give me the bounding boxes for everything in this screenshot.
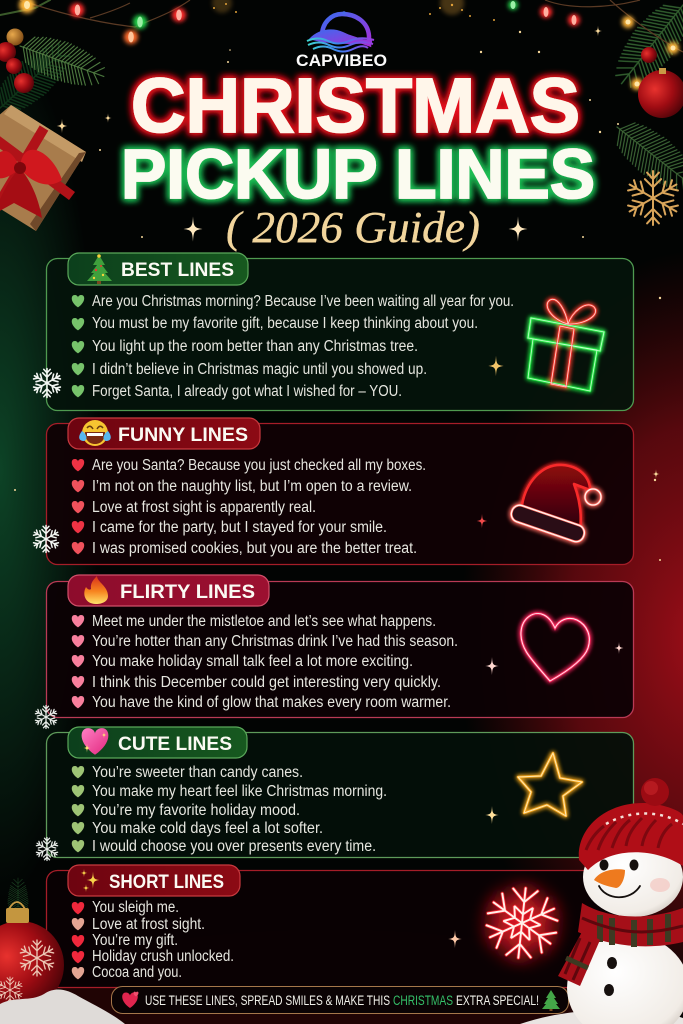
list: cute lines: You’re sweeter than candy canes. (92, 764, 303, 781)
logo (296, 11, 387, 70)
heading: short lines (68, 865, 240, 896)
list: cute lines: You’re my favorite holiday mood. (92, 802, 300, 819)
list: funny lines: I’m not on the naughty list, but I’m open to a review. (92, 478, 412, 495)
list: funny lines: Are you Santa? Because you just checked all my boxes. (92, 457, 426, 474)
list: best lines: You must be my favorite gift, because I keep thinking about you. (92, 315, 478, 332)
snow bottom left (0, 990, 125, 1024)
icon: small snowflake (32, 526, 60, 552)
list: cute lines: You make my heart feel like Christmas morning. (92, 783, 387, 800)
face (594, 860, 670, 897)
brand name: CAPVIBEO (296, 52, 387, 70)
sparkle (614, 642, 624, 654)
list: short lines: Cocoa and you. (92, 964, 182, 981)
panel: best lines (32, 253, 633, 410)
list: funny lines (72, 457, 426, 557)
gift box top left (0, 105, 86, 231)
footer text: USE THESE LINES, SPREAD SMILES & MAKE THIS (145, 993, 390, 1008)
list: short lines: You’re my gift. (92, 932, 178, 949)
snowman (558, 778, 683, 1024)
heading: funny lines (68, 418, 260, 449)
sparkle right (509, 216, 527, 242)
sparkle (488, 356, 504, 376)
subtitle: ( 2026 Guide) (226, 203, 480, 252)
icon: christmas tree (87, 254, 112, 284)
icon: small snowflake (32, 368, 62, 398)
golden sparkle clusters at top (212, 0, 495, 21)
hat (579, 778, 683, 870)
star dust (14, 26, 661, 561)
sparkle (485, 657, 499, 675)
list: best lines (72, 293, 514, 400)
footer banner (112, 986, 568, 1014)
list: funny lines: Love at frost sight is apparently real. (92, 499, 316, 516)
list: short lines (72, 899, 234, 981)
list: best lines: I didn’t believe in Christmas magic until you showed up. (92, 361, 427, 378)
body (567, 934, 683, 1024)
title line: Christmas: CHRISTMAS (131, 63, 580, 149)
list: flirty lines (72, 613, 458, 711)
list: flirty lines: I think this December could get interesting very quickly. (92, 674, 441, 691)
pine branches top left (0, 0, 111, 123)
panel: short lines (46, 865, 636, 988)
sparkle (448, 930, 462, 948)
icon: neon snowflake (482, 884, 562, 962)
icon: laughing face (79, 420, 111, 446)
heading: best lines: BEST LINES (121, 259, 234, 281)
icon: sparkling heart (82, 728, 108, 755)
footer text: CHRISTMAS (393, 993, 453, 1008)
icon: small snowflake (34, 706, 58, 728)
sparkle left (184, 216, 202, 242)
list: flirty lines: You make holiday small talk feel a lot more exciting. (92, 653, 413, 670)
buttons (604, 957, 617, 996)
list: cute lines (72, 764, 387, 855)
heading: flirty lines (68, 575, 269, 606)
icon: fire (84, 576, 108, 604)
list: funny lines: I came for the party, but I stayed for your smile. (92, 519, 387, 536)
icon: neon gift (528, 299, 604, 391)
list: best lines: You light up the room better than any Christmas tree. (92, 338, 418, 355)
list: funny lines: I was promised cookies, but you are the better treat. (92, 540, 417, 557)
list: short lines: You sleigh me. (92, 899, 179, 916)
string lights top left (19, 0, 190, 44)
panel: funny lines (32, 418, 634, 564)
sparkle (477, 514, 487, 528)
list: short lines: Love at frost sight. (92, 916, 205, 933)
list: short lines: Holiday crush unlocked. (92, 948, 234, 965)
icon: neon santa hat (509, 465, 601, 544)
list: cute lines: I would choose you over presents every time. (92, 838, 376, 855)
title (121, 63, 595, 252)
gold snowflake top right (626, 171, 680, 225)
list: flirty lines: You’re hotter than any Christmas drink I’ve had this season. (92, 633, 458, 650)
string lights top right (508, 0, 683, 90)
list: best lines: Forget Santa, I already got what I wished for – YOU. (92, 383, 402, 400)
baubles top right (638, 47, 683, 118)
list: best lines: Are you Christmas morning? Because I’ve been waiting all year for you. (92, 293, 514, 310)
icon: heart (122, 992, 138, 1008)
title line: Pickup Lines: PICKUP LINES (121, 135, 595, 213)
pine branches top right (604, 0, 683, 201)
heading: funny lines: FUNNY LINES (118, 424, 248, 446)
list: flirty lines: Meet me under the mistletoe and let’s see what happens. (92, 613, 436, 630)
heading: flirty lines: FLIRTY LINES (120, 581, 255, 603)
heading: cute lines (68, 727, 247, 758)
heading: best lines (68, 253, 248, 285)
icon: cap logo (307, 11, 374, 51)
footer text: EXTRA SPECIAL! (456, 993, 539, 1008)
sparkle (485, 806, 499, 824)
icon: sparkles (81, 869, 99, 892)
icon: small snowflake (35, 838, 59, 860)
head (583, 837, 683, 917)
icon: tree (542, 990, 560, 1011)
icon: neon heart (521, 614, 589, 681)
panel: cute lines (35, 727, 633, 860)
icon: neon star (518, 753, 582, 816)
scarf (558, 903, 683, 986)
snow bottom right (520, 1009, 683, 1024)
ornament bottom left (0, 878, 64, 1009)
list: cute lines: You make cold days feel a lot softer. (92, 820, 323, 837)
list: flirty lines: You have the kind of glow that makes every room warmer. (92, 694, 451, 711)
panel: flirty lines (34, 575, 633, 728)
baubles top left (0, 28, 34, 93)
heading: short lines: SHORT LINES (109, 871, 224, 893)
heading: cute lines: CUTE LINES (118, 733, 232, 755)
